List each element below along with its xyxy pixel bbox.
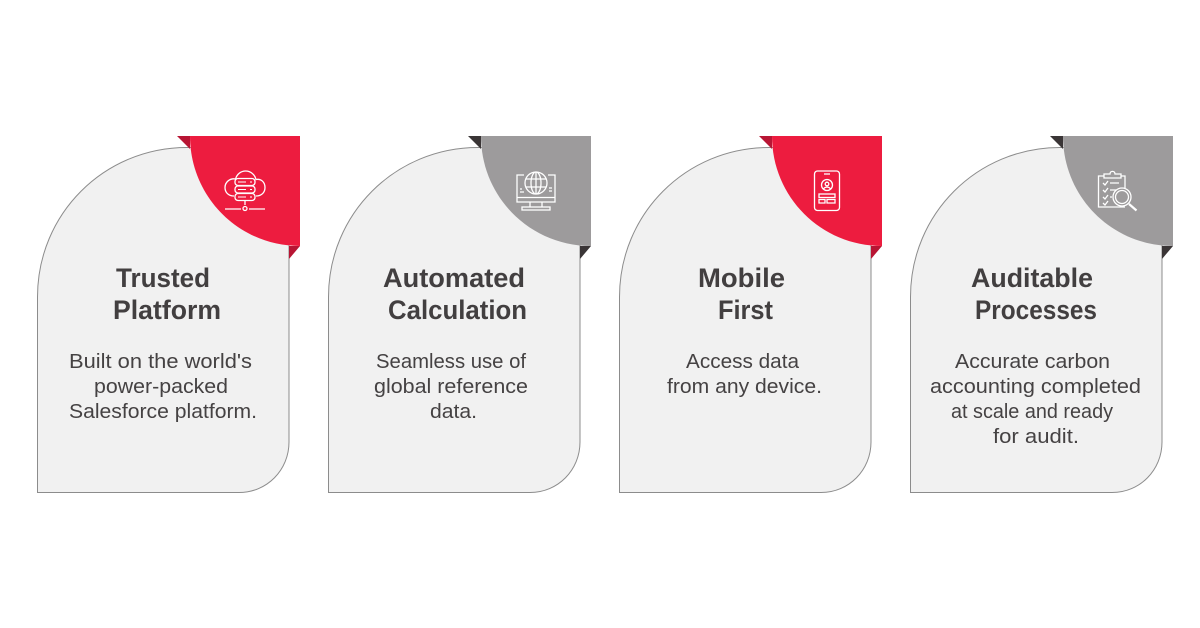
ribbon fold bottom <box>289 246 300 259</box>
heading <box>383 263 527 325</box>
body text <box>930 351 1141 448</box>
card background <box>38 148 289 492</box>
ribbon fold bottom <box>1162 246 1173 259</box>
heading: Trusted <box>116 263 210 293</box>
ribbon fold top <box>468 136 481 149</box>
heading <box>698 263 785 325</box>
heading: First <box>718 295 773 325</box>
corner tab <box>481 136 591 246</box>
icon: cloud server <box>225 171 265 210</box>
body text: Seamless use of <box>376 351 526 373</box>
body text <box>374 351 528 423</box>
heading: Calculation <box>388 295 527 325</box>
heading: Platform <box>113 295 221 325</box>
icon: clipboard with magnifier <box>1098 171 1136 210</box>
body text: for audit. <box>993 426 1079 448</box>
ribbon fold bottom <box>580 246 591 259</box>
corner tab <box>1063 136 1173 246</box>
body text: from any device. <box>667 376 822 398</box>
body text: Built on the world's <box>69 351 252 373</box>
icon: mobile profile <box>814 171 840 210</box>
body text <box>667 351 822 398</box>
ribbon fold top <box>177 136 190 149</box>
icon: globe on monitor <box>517 172 555 210</box>
heading: Mobile <box>698 263 785 293</box>
card background <box>910 148 1162 492</box>
body text: Access data <box>686 351 800 373</box>
corner tab <box>190 136 300 246</box>
ribbon fold bottom <box>871 246 882 259</box>
body text: data. <box>430 401 477 423</box>
heading: Processes <box>975 295 1097 325</box>
body text: Accurate carbon <box>955 351 1110 373</box>
panel: Auditable Processes <box>910 136 1173 492</box>
heading: Automated <box>383 263 525 293</box>
heading <box>113 263 221 325</box>
panel: Mobile First <box>620 136 882 492</box>
ribbon fold top <box>1050 136 1063 149</box>
body text: accounting completed <box>930 376 1141 398</box>
heading: Auditable <box>971 263 1093 293</box>
body text <box>69 351 257 423</box>
card background <box>620 148 871 492</box>
body text: at scale and ready <box>951 401 1113 423</box>
panel: Automated Calculation <box>328 136 591 492</box>
corner tab <box>772 136 882 246</box>
body text: Salesforce platform. <box>69 401 257 423</box>
card background <box>328 148 580 492</box>
panel: Trusted Platform <box>38 136 300 492</box>
body text: power-packed <box>94 376 228 398</box>
ribbon fold top <box>759 136 772 149</box>
body text: global reference <box>374 376 528 398</box>
heading <box>971 263 1097 325</box>
